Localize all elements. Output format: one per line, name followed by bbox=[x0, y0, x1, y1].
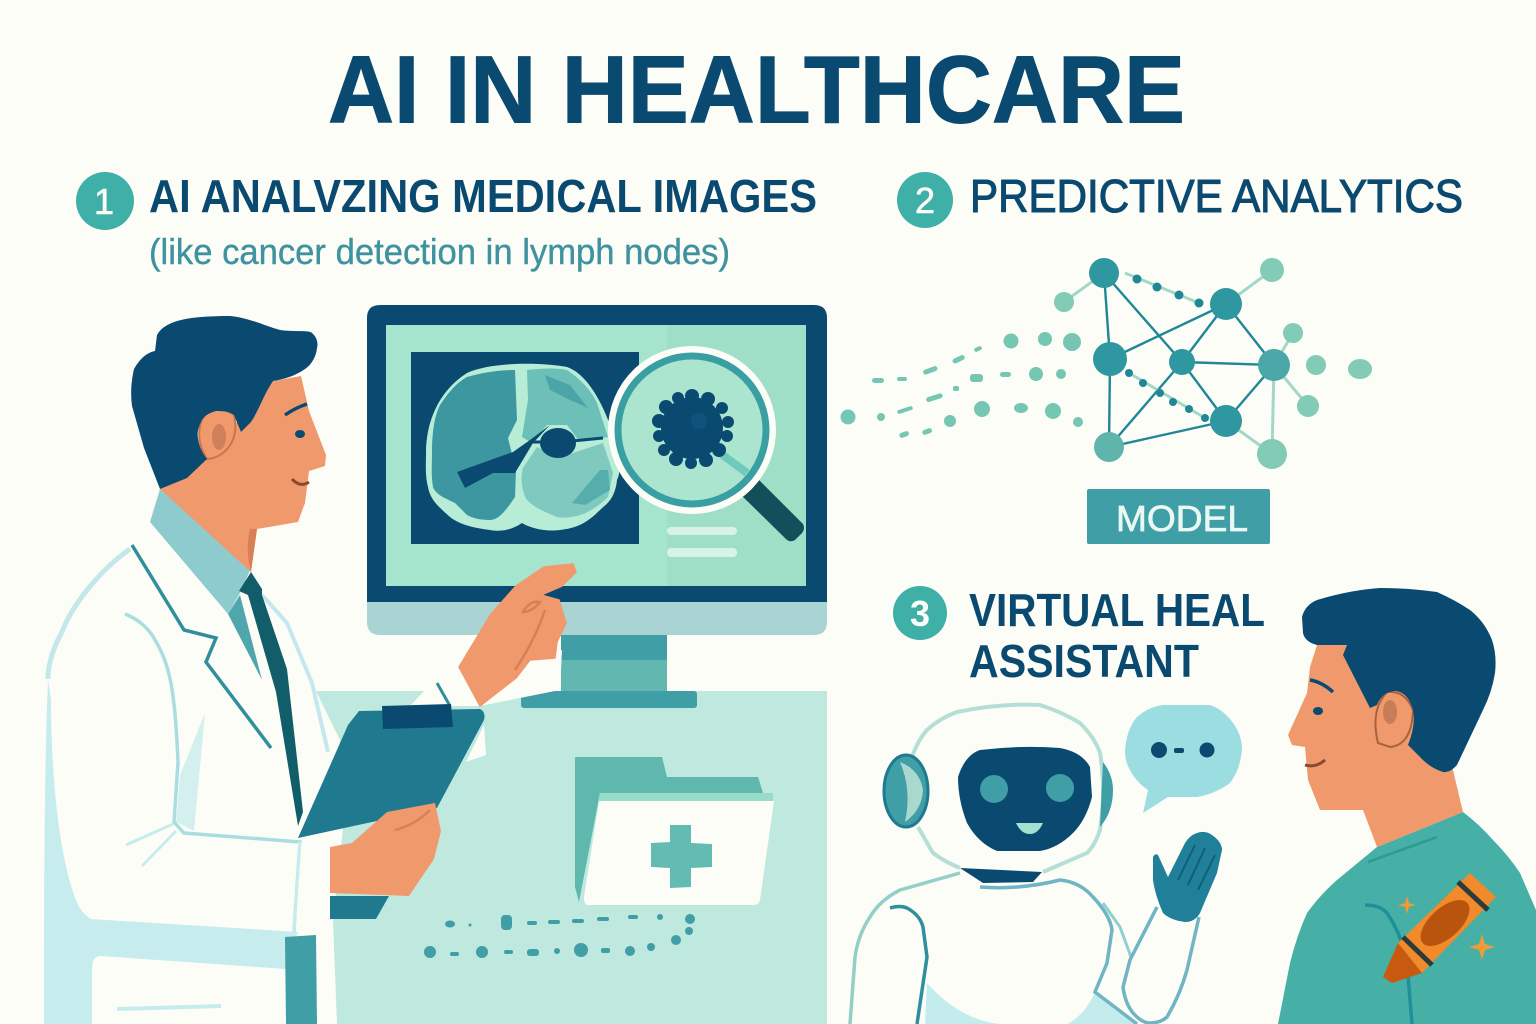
heading 1: AI analyzing medical images: (like cancer detection in lymph nodes) bbox=[149, 231, 730, 272]
desk panel bbox=[316, 691, 827, 1024]
face features bbox=[1310, 680, 1333, 692]
head and neck bbox=[1288, 640, 1463, 847]
right lobe lower bbox=[522, 443, 613, 518]
heading 2: predictive analytics: PREDICTIVE ANALYTICS bbox=[970, 170, 1463, 222]
screen bbox=[386, 325, 806, 586]
heading 3: virtual health assistant bbox=[893, 584, 1265, 687]
model label bbox=[1087, 489, 1270, 544]
sleeve lines bbox=[125, 614, 300, 932]
ear bbox=[199, 409, 235, 459]
monitor stand bbox=[561, 630, 667, 660]
monitor chin bbox=[367, 596, 827, 635]
ear bbox=[1375, 692, 1413, 747]
heading 2: predictive analytics: 2 bbox=[915, 180, 935, 221]
scan image bbox=[411, 352, 639, 544]
face features bbox=[285, 404, 307, 415]
monitor bbox=[367, 305, 827, 708]
model label: MODEL bbox=[1116, 498, 1248, 539]
shirt bbox=[1278, 812, 1536, 1024]
heading 3: virtual health assistant: 3 bbox=[910, 593, 930, 634]
coat lapel bbox=[132, 545, 271, 748]
monitor frame bbox=[367, 305, 827, 602]
hair bbox=[131, 316, 317, 489]
clipboard bbox=[298, 704, 484, 919]
doctor bbox=[44, 316, 576, 1024]
right lobe upper bbox=[522, 368, 608, 443]
crayon icon bbox=[1383, 873, 1496, 983]
left lobe bbox=[432, 370, 517, 520]
coat strip bbox=[285, 935, 317, 1024]
tie bbox=[239, 572, 303, 826]
hair bbox=[1302, 588, 1496, 772]
robot hand bbox=[1153, 832, 1222, 922]
robot visor bbox=[958, 747, 1092, 851]
sleeve of pointing arm bbox=[410, 667, 480, 706]
robot body bbox=[850, 873, 960, 1024]
data dots under folder bbox=[424, 914, 695, 958]
heading 1: AI analyzing medical images: AI ANALVZING MEDICAL IMAGES bbox=[149, 170, 817, 222]
magnifying glass bbox=[608, 346, 804, 541]
report lines bbox=[667, 527, 737, 535]
folder with medical cross bbox=[575, 757, 774, 905]
white cuff bbox=[296, 842, 330, 932]
robot belly bbox=[925, 983, 1137, 1024]
tumor bbox=[652, 389, 734, 469]
lab coat bbox=[44, 522, 345, 1024]
holding hand bbox=[330, 803, 441, 896]
predictive analytics data stream bbox=[840, 332, 1083, 439]
heading 1: AI analyzing medical images: 1 bbox=[94, 181, 114, 222]
shirt and neck bbox=[150, 489, 251, 614]
robot head bbox=[912, 705, 1103, 872]
patient bbox=[1278, 588, 1536, 1024]
heading 3: virtual health assistant: ASSISTANT bbox=[969, 635, 1199, 687]
heading 1: AI analyzing medical images bbox=[76, 170, 817, 272]
pointing hand bbox=[459, 564, 576, 706]
neural network bbox=[1054, 258, 1372, 469]
coat shading bbox=[44, 679, 298, 1024]
robot assistant bbox=[850, 705, 1242, 1024]
speech bubble bbox=[1125, 705, 1242, 813]
robot ear bbox=[884, 755, 928, 827]
title: AI IN HEALTHCARE bbox=[328, 36, 1185, 144]
heading 3: virtual health assistant: VIRTUAL HEAL bbox=[969, 584, 1265, 636]
robot neck bbox=[960, 868, 1042, 883]
lymph node lesion bbox=[457, 425, 550, 488]
